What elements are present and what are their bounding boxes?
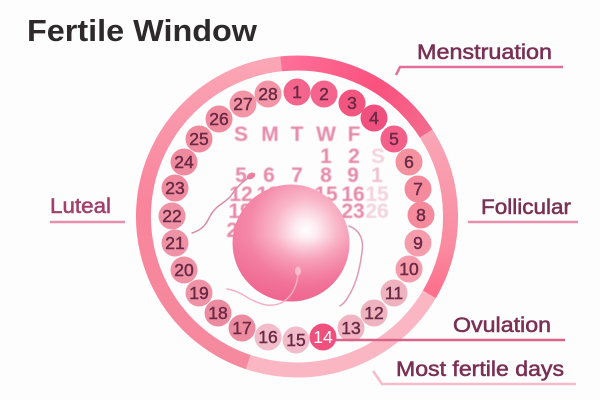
day 17: 17 <box>232 318 252 338</box>
day 25 <box>186 126 212 152</box>
date row 4 <box>228 200 389 223</box>
day 11: 11 <box>385 283 403 303</box>
date row 3: 13 <box>256 183 280 206</box>
day 7 <box>404 176 432 202</box>
ring segment: menstruation <box>281 63 426 134</box>
label: luteal: Luteal <box>50 195 111 218</box>
day 26: 26 <box>209 109 229 129</box>
date row 3: 15 <box>314 183 338 206</box>
day 23 <box>162 174 188 202</box>
day 24: 24 <box>174 152 194 172</box>
day circles <box>158 78 434 354</box>
day 21 <box>162 230 188 256</box>
date row 4: 19 <box>228 200 252 223</box>
date row 5: 26 <box>226 219 250 242</box>
label: most fertile days <box>373 358 576 384</box>
day 20 <box>170 256 198 284</box>
day 9 <box>404 230 432 256</box>
day 14 ovulation marker: 14 <box>313 327 333 347</box>
day 2 <box>310 80 338 108</box>
day 15 <box>282 326 310 354</box>
day 25: 25 <box>189 129 209 149</box>
label: menstruation <box>396 41 563 75</box>
day 1: 1 <box>292 82 302 102</box>
day 19: 19 <box>189 283 209 303</box>
day 14 ovulation marker <box>310 324 336 350</box>
date row 3: 15 <box>365 183 389 206</box>
day 10 <box>396 256 422 282</box>
day 1 <box>284 78 310 106</box>
day 27: 27 <box>233 94 253 114</box>
date row 2: 9 <box>347 164 359 187</box>
day 27 <box>230 90 256 118</box>
label: luteal <box>50 195 125 222</box>
day 22: 22 <box>162 206 182 226</box>
date row 2: 6 <box>263 164 275 187</box>
date row 2: 5 <box>235 164 247 187</box>
ring segment: most fertile days <box>248 294 429 370</box>
day 12 <box>360 300 388 326</box>
label: menstruation: Menstruation <box>417 41 552 64</box>
date row 2: 1 <box>371 164 383 187</box>
day 12: 12 <box>364 303 384 323</box>
date row 3 <box>229 183 389 206</box>
egg cell <box>232 184 350 302</box>
date row 1: S <box>371 145 385 168</box>
title: Fertile Window <box>27 13 258 48</box>
day 4: 4 <box>369 108 379 128</box>
weekday row: S <box>234 123 248 146</box>
date row 1: 2 <box>348 145 360 168</box>
sperm: right tail <box>340 226 362 306</box>
day 23: 23 <box>165 178 185 198</box>
sperm: upper left <box>192 171 256 233</box>
day 8 <box>408 202 434 228</box>
day 22 <box>158 202 186 230</box>
label: follicular <box>468 196 578 222</box>
day 8: 8 <box>416 205 426 225</box>
day 4 <box>360 104 388 132</box>
day 28: 28 <box>258 84 278 104</box>
day 6: 6 <box>404 152 414 172</box>
ovulation leader line <box>330 339 565 341</box>
day 15: 15 <box>286 330 306 350</box>
ring segment: follicular <box>426 134 451 294</box>
date row 2 <box>235 164 383 187</box>
weekday row: M <box>261 123 279 146</box>
label: ovulation: Ovulation <box>453 314 551 337</box>
day 6 <box>396 148 422 176</box>
day 16 <box>254 324 282 350</box>
day 19 <box>186 280 212 306</box>
day 10: 10 <box>399 259 419 279</box>
date row 2: 7 <box>291 164 303 187</box>
label: most fertile days: Most fertile days <box>396 358 564 381</box>
day 11 <box>380 280 408 306</box>
day 3: 3 <box>347 93 357 113</box>
day 2: 2 <box>319 84 329 104</box>
day 3 <box>338 90 366 116</box>
date row 3: 12 <box>229 183 253 206</box>
weekday row <box>234 123 361 146</box>
phase ring <box>143 63 451 370</box>
day 17 <box>228 314 256 342</box>
date row 3: 16 <box>341 183 365 206</box>
weekday row: W <box>316 123 336 146</box>
day 18 <box>204 300 232 326</box>
date row 4: 26 <box>365 200 389 223</box>
day 18: 18 <box>208 303 228 323</box>
day 5 <box>380 126 408 152</box>
day 13: 13 <box>341 318 361 338</box>
day 9: 9 <box>413 233 423 253</box>
day 28 <box>254 80 282 108</box>
day 26 <box>206 106 232 132</box>
date row 1 <box>320 145 385 168</box>
sperm cells <box>192 171 362 306</box>
date row 1: 1 <box>320 145 332 168</box>
day 7: 7 <box>413 179 423 199</box>
day 5: 5 <box>389 129 399 149</box>
calendar grid <box>226 123 389 242</box>
label: follicular: Follicular <box>481 196 571 219</box>
ring segment: luteal <box>143 64 281 362</box>
day 13 <box>338 314 364 342</box>
day 24 <box>170 148 198 176</box>
date row 2: 8 <box>320 164 332 187</box>
weekday row: T <box>291 123 304 146</box>
day 21: 21 <box>165 233 185 253</box>
weekday row: F <box>348 123 361 146</box>
sperm: lower <box>227 266 301 305</box>
day 16: 16 <box>258 327 278 347</box>
day 20: 20 <box>174 260 194 280</box>
date row 4: 23 <box>341 200 365 223</box>
